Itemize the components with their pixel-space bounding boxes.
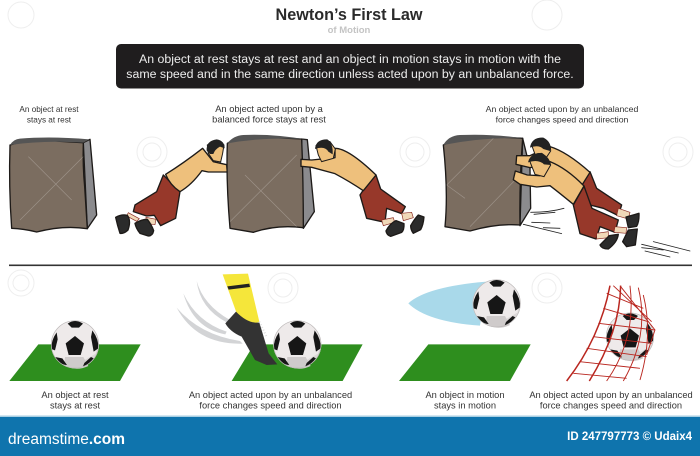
bottom scene: ball in motion — [399, 279, 531, 381]
divider — [9, 264, 692, 266]
label: ball in net: force changes speed and direction — [540, 400, 682, 410]
stone moving — [443, 135, 531, 231]
label: kicked ball: An object acted upon by an unbalanced — [189, 390, 352, 400]
man pushing from left — [116, 139, 227, 236]
motion trail — [408, 282, 487, 326]
label: ball in net: An object acted upon by an unbalanced — [529, 390, 693, 400]
shoes — [386, 221, 404, 236]
definition banner: An object at rest stays at rest and an object in motion stays in motion with the — [139, 52, 561, 66]
ankles — [382, 212, 413, 226]
grass — [399, 344, 531, 381]
back man — [516, 138, 639, 247]
head — [207, 142, 224, 162]
front man — [513, 153, 627, 249]
net — [567, 286, 655, 381]
torso — [166, 148, 227, 192]
definition banner — [116, 44, 584, 88]
ball — [473, 279, 521, 328]
label: unbalanced force: An object acted upon by an unbalanced — [486, 104, 638, 114]
head — [316, 141, 335, 162]
two men pushing — [513, 138, 639, 249]
label: balanced force: An object acted upon by a — [215, 104, 324, 114]
image id: ID 247797773 © Udaix4 — [567, 431, 693, 443]
subtitle: of Motion — [328, 25, 371, 36]
bottom scene: ball at rest — [9, 320, 141, 381]
definition banner: same speed and in the same direction unless acted upon by an unbalanced force. — [126, 67, 574, 81]
pants — [360, 175, 405, 222]
bottom scene: kicked ball — [177, 274, 363, 381]
ball — [51, 320, 99, 369]
label: ball at rest: An object at rest — [41, 390, 109, 400]
boot — [225, 312, 277, 365]
label: ball at rest: stays at rest — [50, 400, 100, 410]
footer bar — [0, 416, 700, 456]
label: rest: stays at rest — [27, 116, 72, 124]
ball — [273, 320, 321, 369]
footer logo: dreamstime.com — [8, 431, 125, 448]
man pushing from right — [301, 139, 424, 236]
motion lines near stone — [523, 208, 690, 257]
shoes — [116, 215, 130, 233]
stone at rest — [10, 137, 97, 232]
label: balanced force: balanced force stays at rest — [212, 114, 326, 124]
torso — [301, 148, 376, 191]
grass — [232, 344, 363, 381]
ball — [606, 313, 654, 361]
bottom scene: ball in net — [567, 286, 655, 381]
label: rest: An object at rest — [19, 105, 79, 114]
label: unbalanced force: force changes speed and direction — [496, 114, 629, 124]
label: ball in motion: An object in motion — [425, 390, 505, 400]
pants — [133, 175, 180, 226]
yellow sock — [223, 274, 259, 327]
label: ball in motion: stays in motion — [434, 400, 496, 410]
ankles — [127, 213, 156, 225]
stone balanced — [227, 135, 314, 232]
swoosh motion trails — [177, 281, 243, 344]
grass — [9, 344, 141, 381]
title: Newton’s First Law — [276, 6, 423, 24]
label: kicked ball: force changes speed and direction — [199, 400, 342, 410]
